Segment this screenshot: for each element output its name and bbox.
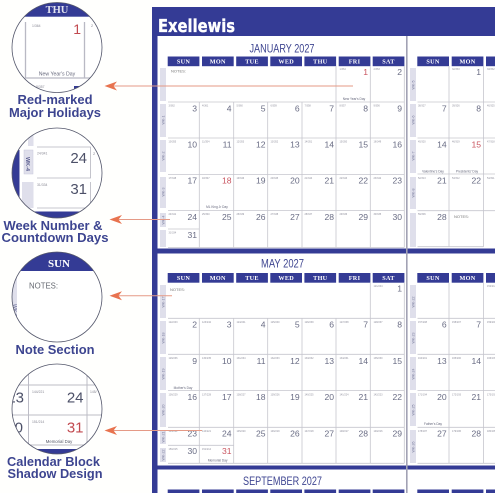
panel: January 2027 <box>160 44 404 248</box>
May day numbers: 133/232 <box>304 357 314 360</box>
May day numbers: 121/244 <box>374 285 383 288</box>
January day numbers: 1 <box>363 67 368 77</box>
label line 2: Major Holidays <box>9 106 101 120</box>
January weekday header: WED <box>278 58 294 66</box>
January day numbers: 5 <box>261 104 266 114</box>
January day numbers: 13/352 <box>270 140 279 144</box>
June day numbers: 171/194 <box>418 394 428 396</box>
June day numbers: 28 <box>471 429 481 439</box>
June day numbers: 7 <box>476 320 481 330</box>
February day numbers: 14 <box>437 139 447 149</box>
January day numbers: 23/342 <box>374 177 382 180</box>
January holidays <box>206 97 366 209</box>
May weekday header: MON <box>210 275 226 282</box>
June day numbers: 164/201 <box>418 357 428 360</box>
January day numbers: 1/364 <box>340 68 346 71</box>
September title: SEPTEMBER 2027 <box>243 476 322 488</box>
January day numbers: 3/362 <box>168 104 175 108</box>
arrow: notes <box>110 291 172 300</box>
May day numbers: 29 <box>392 429 402 439</box>
January day numbers: 10/355 <box>168 140 177 144</box>
magnifier: week column <box>10 128 104 222</box>
magnifier: block cells: 145/ <box>90 390 97 394</box>
May day numbers: 147/218 <box>304 430 314 433</box>
January weekday header: TUE <box>245 58 259 66</box>
May day numbers: 130/235 <box>202 357 212 360</box>
panel: May 2027 <box>160 259 404 463</box>
February week number column <box>410 68 416 247</box>
January week number column: WK-2 <box>161 152 165 160</box>
June day numbers: 20 <box>437 392 447 402</box>
February weekday header: SUN <box>426 58 440 66</box>
May day numbers: 134/231 <box>340 357 349 360</box>
January weekday header: SUN <box>177 58 190 66</box>
May day numbers: 141/224 <box>340 394 349 396</box>
May weekday header: SUN <box>177 275 190 282</box>
May day numbers: 123/242 <box>202 321 212 324</box>
May day numbers: 131/234 <box>236 357 246 360</box>
May day numbers: 145/220 <box>236 430 246 433</box>
January day numbers: 26 <box>256 212 266 222</box>
June week number column: WK-23 <box>411 333 415 343</box>
May week number column: WK-21 <box>161 432 165 442</box>
magnifier: week column: WK-4 <box>24 157 30 172</box>
February day numbers: 7 <box>442 104 447 114</box>
January weekday header <box>168 56 404 66</box>
May day numbers: 4 <box>261 320 266 330</box>
magnifier: New Year's Day cell: THU <box>46 5 69 16</box>
label: Week Number & <box>4 219 102 233</box>
February day numbers: 45/320 <box>418 140 426 144</box>
February day numbers: 22 <box>471 175 481 185</box>
magnifier: notes cell: NOTES: <box>29 282 58 290</box>
month separator band upper <box>157 248 495 254</box>
May day numbers: 17 <box>222 392 232 402</box>
January weekday header: MON <box>210 58 226 66</box>
May day numbers: 127/238 <box>340 321 349 324</box>
callout: week number and countdown days <box>2 128 109 245</box>
January day numbers: 7 <box>329 104 334 114</box>
May week number column: WK-17 <box>161 297 165 307</box>
magnifier: week column: 31 <box>70 181 87 198</box>
magnifier: New Year's Day cell: 1 <box>73 21 81 37</box>
May week number column <box>160 285 166 462</box>
February week number column: WK-7 <box>411 152 415 160</box>
February day numbers: 21 <box>437 175 447 185</box>
label line 2: Shadow Design <box>8 467 102 481</box>
May day numbers: 21 <box>358 392 368 402</box>
January notes: NOTES: <box>171 69 186 74</box>
May day numbers: 30 <box>187 446 197 456</box>
February holidays: Presidents' Day <box>456 170 479 174</box>
magnifier: week column: 24 <box>70 150 87 167</box>
May day numbers: 10 <box>222 356 232 366</box>
May day numbers: 6 <box>329 320 334 330</box>
May holidays <box>174 386 228 462</box>
May day numbers: 135/230 <box>374 357 383 360</box>
February grid <box>418 66 495 247</box>
May day numbers: 150/215 <box>168 448 178 451</box>
May day numbers: 1 <box>397 284 402 294</box>
February week number column: WK-6 <box>411 116 415 124</box>
May day numbers: 3 <box>227 320 232 330</box>
magnifier: block cells: 31 <box>67 420 84 436</box>
January day numbers: 14 <box>324 139 334 149</box>
January day numbers: 15 <box>358 139 368 149</box>
January day numbers: 20/345 <box>270 177 279 180</box>
January day numbers: 6 <box>295 104 300 114</box>
May day numbers: 2 <box>192 320 197 330</box>
label: Red-marked <box>18 93 92 107</box>
January day numbers: 14/351 <box>304 140 313 144</box>
January day numbers: 30/335 <box>374 213 382 216</box>
June day numbers <box>418 285 495 439</box>
May day numbers: 23 <box>187 429 197 439</box>
January day numbers: 19/346 <box>236 177 245 180</box>
February weekday header <box>417 56 495 66</box>
May title: MAY 2027 <box>261 259 304 271</box>
February day numbers: 46/319 <box>452 140 460 144</box>
January week number column: WK-3 <box>161 188 165 196</box>
May day numbers: 149/216 <box>374 430 383 433</box>
magnifier: New Year's Day cell <box>10 0 104 96</box>
June day numbers: 27 <box>437 429 447 439</box>
May day numbers: 19 <box>290 392 300 402</box>
June weekday header <box>417 273 495 283</box>
magnifier: block cells <box>6 364 104 457</box>
January day numbers: 22/343 <box>340 177 348 180</box>
February day numbers: 53/312 <box>452 177 460 180</box>
January holidays: ML King Jr Day <box>206 205 228 209</box>
January day numbers: 27 <box>290 212 300 222</box>
magnifier: week column: 31/334 <box>37 183 47 187</box>
January day numbers: 6/359 <box>270 104 277 108</box>
January day numbers: 8 <box>363 104 368 114</box>
magnifier: block cells: 30 <box>6 420 23 436</box>
January day numbers: 18 <box>222 175 232 185</box>
May day numbers: 24 <box>222 429 232 439</box>
May day numbers: 25 <box>256 429 266 439</box>
May weekday header: WED <box>278 275 294 282</box>
February day numbers: 1 <box>476 67 481 77</box>
January day numbers: 16 <box>392 139 402 149</box>
May week number column: WK-20 <box>161 405 165 415</box>
February day numbers: 47/318 <box>487 140 495 144</box>
May weekday header: SAT <box>382 275 395 282</box>
May day numbers: 138/227 <box>236 394 246 396</box>
panel: September 2027 (partial) <box>168 476 495 493</box>
magnifier: week column: 24/341 <box>37 152 47 156</box>
February day numbers: 32/333 <box>452 68 460 71</box>
February holidays <box>422 170 479 174</box>
May day numbers: 8 <box>397 320 402 330</box>
January title: JANUARY 2027 <box>250 44 314 56</box>
January day numbers: 29 <box>358 212 368 222</box>
February week number column: WK-8 <box>411 189 415 197</box>
January week number column: WK-4 <box>161 216 165 224</box>
January day numbers: 11 <box>223 139 232 149</box>
June day numbers: 165/200 <box>452 357 462 360</box>
June week number column: WK-25 <box>411 405 415 415</box>
magnifier: New Year's Day cell: 1/364 <box>32 24 41 28</box>
June day numbers: 157/208 <box>418 321 428 324</box>
May weekday header: THU <box>313 275 328 282</box>
January week number column: WK-1 <box>161 116 165 124</box>
June week number column: WK-24 <box>411 369 415 379</box>
magnifier: notes cell: SUN <box>48 258 70 270</box>
May weekday header: TUE <box>245 275 259 282</box>
January day numbers: 12/353 <box>236 140 245 144</box>
May day numbers: 143/222 <box>168 430 178 433</box>
May day numbers: 132/233 <box>270 357 280 360</box>
January day numbers: 17/348 <box>168 177 177 180</box>
magnifier: block cells: 151/214 <box>32 420 44 424</box>
May weekday header <box>168 273 404 283</box>
January grid <box>168 66 404 248</box>
January day numbers: 4/361 <box>202 104 209 108</box>
February weekday header: MON <box>459 58 476 66</box>
June day numbers: 14 <box>471 356 481 366</box>
February notes: NOTES: <box>454 214 469 219</box>
magnifier: notes cell: WK-1 <box>11 304 17 317</box>
January day numbers: 12 <box>256 139 266 149</box>
January day numbers: 31 <box>187 230 197 240</box>
center fold divider <box>406 36 408 493</box>
magnifier: block cells: 24 <box>67 390 84 406</box>
January day numbers: 27/338 <box>270 213 279 216</box>
panel: February 2027 (partial) <box>410 56 495 247</box>
January day numbers: 16/349 <box>374 140 382 144</box>
label line 2: Countdown Days <box>2 231 109 245</box>
May day numbers: 7 <box>363 320 368 330</box>
May day numbers: 146/219 <box>270 430 280 433</box>
January weekday header: THU <box>313 58 328 66</box>
May weekday header: FRI <box>349 275 361 282</box>
January day numbers: 30 <box>392 212 402 222</box>
February holidays: Valentine's Day <box>422 170 444 174</box>
June day numbers: 178/187 <box>418 430 428 433</box>
June day numbers: 13 <box>437 356 447 366</box>
arrow: block shadow <box>104 426 202 435</box>
May day numbers: 151/214 <box>202 448 212 451</box>
January day numbers: 7/358 <box>304 104 311 108</box>
May day numbers: 142/223 <box>374 394 383 396</box>
callout: red-marked holidays <box>9 0 104 120</box>
May day numbers: 126/239 <box>304 321 314 324</box>
May day numbers: 18 <box>256 392 266 402</box>
February week number column: WK-5 <box>411 81 415 89</box>
February day numbers: 8 <box>476 104 481 114</box>
May week number column: WK-22 <box>161 450 165 460</box>
January day numbers: 17 <box>187 175 197 185</box>
January day numbers: 3 <box>192 104 197 114</box>
callout: note section <box>10 250 104 357</box>
February day numbers: 39/326 <box>452 104 460 108</box>
magnifier: notes cell <box>10 250 104 342</box>
June week number column: WK-26 <box>411 442 415 452</box>
magnifier: block cells: Memorial Day <box>46 439 73 444</box>
February day numbers: 52/313 <box>418 177 426 180</box>
January day numbers: 2 <box>397 67 402 77</box>
January day numbers: 15/350 <box>340 140 348 144</box>
January day numbers: 4 <box>227 104 232 114</box>
January day numbers: 21/344 <box>304 177 313 180</box>
June day numbers: 179/186 <box>452 430 462 433</box>
header bar with brand: Exellewis <box>158 16 235 37</box>
May day numbers: 12 <box>290 356 300 366</box>
May day numbers: 125/240 <box>270 321 280 324</box>
magnifier: New Year's Day cell: 2 <box>91 24 93 28</box>
January day numbers: 9/356 <box>374 104 380 108</box>
January day numbers: 19 <box>256 175 266 185</box>
February day numbers: 54/311 <box>487 177 495 180</box>
month separator band lower <box>157 466 495 470</box>
January day numbers: 8/357 <box>340 104 346 108</box>
panel: June 2027 (partial) <box>410 273 495 463</box>
May day numbers: 136/229 <box>168 394 178 396</box>
February day numbers: 15 <box>471 139 481 149</box>
label: Calendar Block <box>7 455 100 469</box>
May day numbers: 26 <box>290 429 300 439</box>
callout: calendar block shadow <box>6 364 104 481</box>
September weekday header <box>168 490 495 493</box>
January weekday header: SAT <box>382 58 395 66</box>
June holiday: Father's Day <box>424 422 442 426</box>
May day numbers: 137/228 <box>202 394 212 396</box>
May day numbers: 144/221 <box>202 430 212 433</box>
January day numbers: 23 <box>392 175 402 185</box>
June day numbers: 158/207 <box>452 321 462 324</box>
arrow: week number <box>110 215 170 224</box>
June weekday header: MON <box>459 275 476 282</box>
June weekday header: SUN <box>426 275 440 282</box>
May notes: NOTES: <box>170 287 185 292</box>
May day numbers: 124/241 <box>236 321 246 324</box>
arrow: holidays <box>104 82 353 90</box>
January day numbers: 5/360 <box>236 104 243 108</box>
May holidays: Memorial Day <box>208 458 228 462</box>
February day numbers: 38/327 <box>418 104 426 108</box>
January day numbers: 9 <box>397 104 402 114</box>
January day numbers: 29/336 <box>340 213 348 216</box>
May day numbers: 140/225 <box>304 394 314 396</box>
magnifier: New Year's Day cell: New Year's Day <box>39 72 76 78</box>
May day numbers: 129/236 <box>168 357 178 360</box>
January day numbers: 21 <box>324 175 334 185</box>
header bar with brand <box>152 7 495 493</box>
June day numbers: 21 <box>471 392 481 402</box>
magnifier: block cells: 144/221 <box>32 390 44 394</box>
January day numbers <box>168 67 402 240</box>
January day numbers: 25/340 <box>202 213 210 216</box>
May week number column: WK-19 <box>161 369 165 379</box>
magnifier: New Year's Day cell: 8/357 <box>36 85 45 89</box>
January day numbers: 24 <box>187 212 197 222</box>
May day numbers: 128/237 <box>374 321 383 324</box>
January holidays: New Year's Day <box>343 97 366 101</box>
May day numbers: 22 <box>392 392 402 402</box>
June day numbers: 6 <box>442 320 447 330</box>
panel: calendar poster <box>152 7 495 493</box>
February day numbers: 40/325 <box>487 104 495 108</box>
February day numbers: 33/332 <box>487 68 495 71</box>
January day numbers: 20 <box>290 175 300 185</box>
May day numbers: 11 <box>257 356 266 366</box>
January day numbers: 24/341 <box>168 213 177 216</box>
May day numbers: 14 <box>358 356 368 366</box>
May day numbers: 27 <box>324 429 334 439</box>
May day numbers: 31 <box>222 446 232 456</box>
magnifier: block cells: 23 <box>7 390 24 406</box>
January day numbers: 22 <box>358 175 368 185</box>
May day numbers: 9 <box>192 356 197 366</box>
January day numbers: 26/339 <box>236 213 245 216</box>
January day numbers: 18/347 <box>202 177 210 180</box>
January day numbers: 25 <box>222 212 232 222</box>
January day numbers: 28/337 <box>304 213 313 216</box>
June grid <box>418 283 495 463</box>
January day numbers: 10 <box>187 139 197 149</box>
February day numbers <box>418 67 495 222</box>
May day numbers: 16 <box>187 392 197 402</box>
May day numbers: 28 <box>358 429 368 439</box>
magnifier: week column: 2 <box>93 151 96 156</box>
January day numbers: 31/334 <box>168 232 177 234</box>
May day numbers: 148/217 <box>340 430 349 433</box>
May day numbers: 20 <box>324 392 334 402</box>
January day numbers: 28 <box>324 212 334 222</box>
June day numbers: 172/193 <box>452 394 462 396</box>
May day numbers: 122/243 <box>168 321 178 324</box>
January day numbers: 2/363 <box>374 68 380 71</box>
May day numbers: 15 <box>392 356 402 366</box>
January weekday header: FRI <box>349 58 361 66</box>
February day numbers: 59/306 <box>418 213 426 216</box>
May day numbers: 13 <box>324 356 334 366</box>
June week number column: WK-22 <box>411 297 415 307</box>
May day numbers <box>168 284 402 456</box>
May week number column: WK-18 <box>161 333 165 343</box>
February day numbers: 28 <box>437 212 447 222</box>
label: Note Section <box>16 343 94 357</box>
May day numbers: 139/226 <box>270 394 280 396</box>
January day numbers: 11/354 <box>202 140 210 144</box>
January week number column <box>160 68 166 247</box>
January day numbers: 13 <box>290 139 300 149</box>
May grid <box>168 283 404 463</box>
June week number column <box>410 285 416 463</box>
May holidays: Mother's Day <box>174 386 193 390</box>
May day numbers: 5 <box>295 320 300 330</box>
